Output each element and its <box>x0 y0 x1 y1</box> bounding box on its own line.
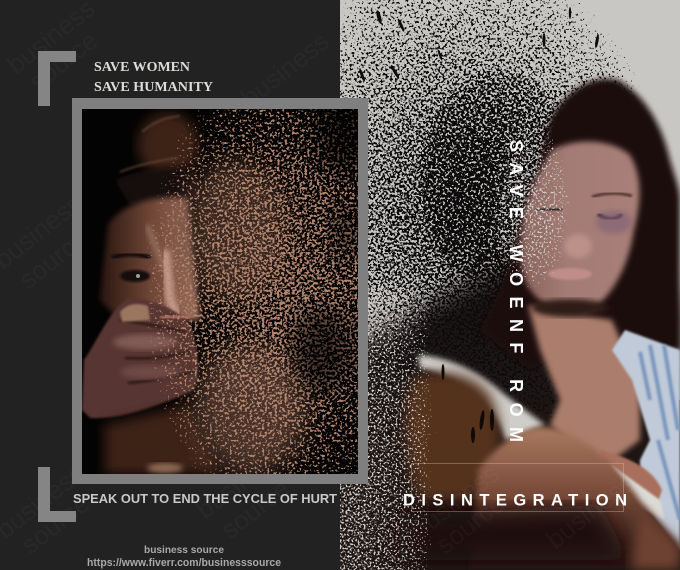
dark lower background <box>368 248 680 400</box>
hair <box>480 79 680 370</box>
photo frame <box>72 98 368 484</box>
face <box>100 197 200 320</box>
footer credit: https://www.fiverr.com/businesssource <box>87 557 281 569</box>
top-left corner bracket <box>38 51 76 106</box>
disintegration title: DISINTEGRATION <box>403 492 627 510</box>
neck and chest <box>528 305 640 470</box>
left dark panel <box>0 0 340 570</box>
heading: save women save humanity: SAVE WOMEN <box>94 60 190 75</box>
solid dark base <box>340 400 680 570</box>
right photo: woman disintegrating <box>340 0 680 570</box>
footer credit <box>87 544 281 569</box>
dark patches in cloud <box>286 109 358 400</box>
drips on knee <box>442 364 494 443</box>
hand <box>82 298 198 418</box>
left photo: woman with covered mouth <box>82 109 358 474</box>
watermarks: source <box>23 25 103 97</box>
right knee <box>470 427 680 570</box>
watermarks: business <box>190 438 290 525</box>
vertical title: SAVE WOENF ROM <box>506 140 526 442</box>
watermarks: source <box>215 473 295 545</box>
heading: save women save humanity <box>94 60 213 95</box>
white sleeve <box>418 355 545 440</box>
caption: speak out: SPEAK OUT TO END THE CYCLE OF HURT <box>73 491 337 506</box>
shirt <box>600 330 680 550</box>
watermarks: source <box>15 488 95 560</box>
watermarks: business <box>405 458 505 545</box>
neck and chest <box>105 405 220 474</box>
footer credit: business source <box>144 544 224 556</box>
large black streaks <box>358 7 600 82</box>
white particle cloud <box>340 115 572 570</box>
bottom-left corner bracket <box>38 467 76 522</box>
hair bun <box>138 113 198 177</box>
watermarks: business <box>540 468 640 555</box>
heading: save women save humanity: SAVE HUMANITY <box>94 80 213 95</box>
watermarks: source <box>430 488 510 560</box>
outlined title box <box>412 464 624 512</box>
soft glow under particles <box>185 160 305 475</box>
particle cloud <box>146 109 358 474</box>
watermarks: source <box>13 223 93 295</box>
hair <box>115 168 200 205</box>
watermarks: business <box>235 26 335 113</box>
lower right leg <box>630 510 680 570</box>
face <box>520 142 640 315</box>
black particle cloud <box>340 0 653 478</box>
left knee <box>405 372 500 500</box>
lower shadow <box>400 505 630 560</box>
facial features <box>532 193 632 317</box>
